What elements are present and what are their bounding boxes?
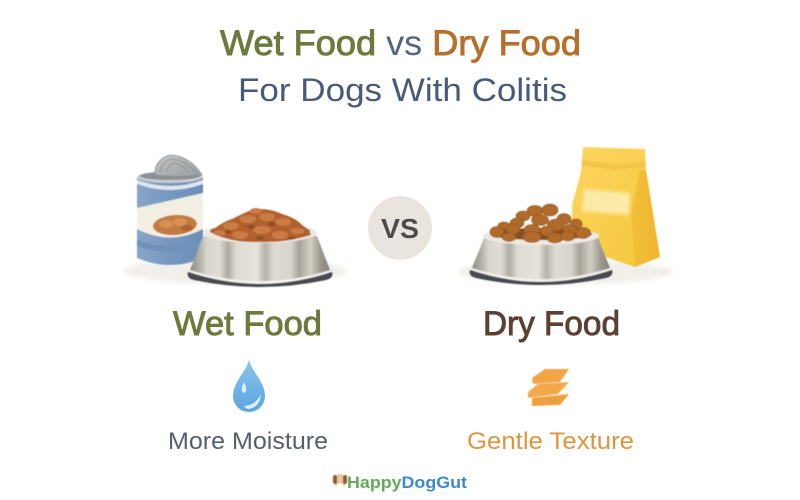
ground shadow [123, 258, 347, 284]
icon: water drop [233, 360, 265, 412]
icon: bowl of wet food [188, 208, 332, 287]
wet food illustration: can and bowl [123, 155, 347, 287]
title [220, 24, 581, 108]
vs badge: VS [381, 213, 419, 244]
heading: dry food: Dry Food [483, 305, 620, 343]
icon: dog face [333, 474, 347, 488]
ground shadow [457, 260, 673, 284]
title line 1: Wet Food vs Dry Food [220, 24, 581, 63]
title line 2: For Dogs With Colitis [238, 72, 567, 108]
icon: bowl of dry kibble [470, 204, 612, 285]
icon: stacked texture layers [528, 369, 569, 406]
footer brand: HappyDogGut [333, 473, 467, 492]
brand name: HappyDogGut [347, 473, 467, 492]
icon: open can [137, 155, 203, 265]
dry food column [467, 305, 634, 455]
heading: wet food: Wet Food [173, 305, 322, 343]
icon: yellow kibble bag [572, 147, 660, 267]
wet food column [168, 305, 328, 455]
benefit label: more moisture: More Moisture [168, 428, 328, 455]
vs badge [368, 196, 432, 260]
benefit label: gentle texture: Gentle Texture [467, 428, 634, 455]
dry food illustration: bag and bowl [457, 147, 673, 285]
